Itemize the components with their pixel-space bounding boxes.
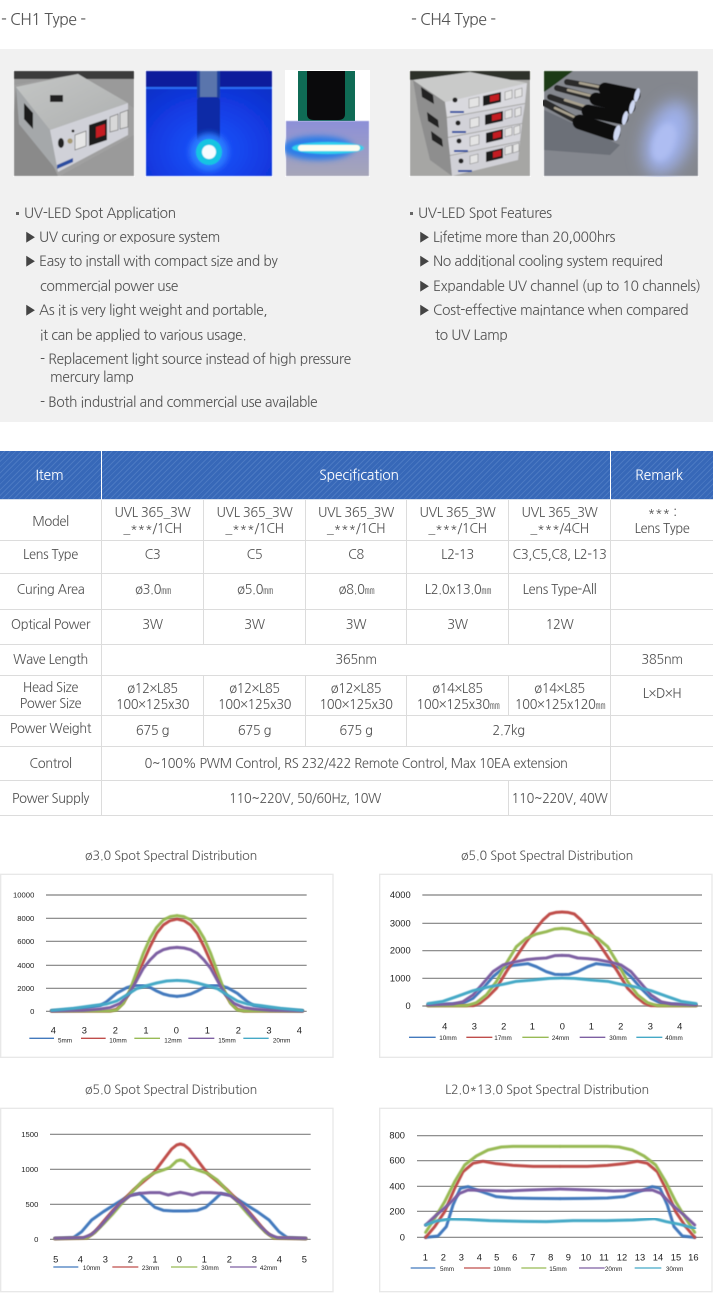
x axis labels: 2 <box>113 1025 118 1035</box>
x axis labels: 6 <box>512 1253 517 1263</box>
photo: line beam lens <box>285 70 370 177</box>
chart: ø5.0 spot spectral distribution, bottom left <box>0 1083 334 1292</box>
text block: UV-LED Spot Application <box>16 206 351 410</box>
x axis labels: 15 <box>671 1253 681 1263</box>
row: Model: _***/1CH <box>327 522 385 534</box>
y axis labels: 0 <box>30 1007 34 1016</box>
text block: UV-LED Spot Features: to UV Lamp <box>435 329 508 343</box>
y axis labels: 0 <box>400 1232 405 1242</box>
chart title: ø5.0 Spot Spectral Distribution <box>85 1083 257 1096</box>
series: 10mm <box>428 964 696 1005</box>
row: Power Supply <box>0 781 713 816</box>
row: Curing Area: L2.0x13.0㎜ <box>425 582 490 596</box>
y axis labels: 3000 <box>390 918 411 928</box>
row: Head Size and Power Size: L×D×H <box>643 687 681 700</box>
y axis labels <box>21 1130 38 1244</box>
x axis labels: 2 <box>501 1022 506 1032</box>
series: 30mm <box>428 955 696 1005</box>
legend: 24mm <box>552 1035 569 1042</box>
legend: 20mm <box>273 1038 290 1044</box>
y axis labels: 2000 <box>390 946 411 956</box>
row: Power Weight: 2.7kg <box>492 724 525 736</box>
x axis labels: 0 <box>177 1255 182 1265</box>
x axis labels: 4 <box>677 1022 682 1032</box>
row: Model: UVL 365_3W <box>419 506 496 518</box>
row: Optical Power <box>0 610 713 645</box>
row: Curing Area: Curing Area <box>17 583 84 596</box>
series: 10mm <box>52 919 302 1011</box>
chart: ø3.0 spot spectral distribution <box>0 849 334 1058</box>
x axis labels <box>51 1025 302 1035</box>
row: Head Size and Power Size: Power Size <box>20 696 81 710</box>
row: Curing Area: ø3.0㎜ <box>135 582 170 596</box>
series: 10mm <box>55 1194 306 1238</box>
text block: UV-LED Spot Application: UV-LED Spot Application <box>24 207 176 221</box>
text block: UV-LED Spot Application: UV curing or exposure system <box>39 231 220 245</box>
text block: UV-LED Spot Features: ▶ <box>418 231 431 245</box>
row: Head Size and Power Size: ø12×L85 <box>331 682 381 695</box>
series: 5mm <box>426 1187 695 1237</box>
x axis labels: 2 <box>128 1255 133 1265</box>
chart title: ø5.0 Spot Spectral Distribution <box>461 849 633 862</box>
x axis labels: 4 <box>297 1025 302 1035</box>
x axis labels: 4 <box>51 1025 56 1035</box>
x axis labels: 2 <box>236 1025 241 1035</box>
row: Curing Area: ø5.0㎜ <box>237 582 272 596</box>
row: Head Size and Power Size: 100×125x30 <box>319 698 393 711</box>
x axis labels: 4 <box>78 1255 83 1265</box>
row: Model: UVL 365_3W <box>522 506 598 518</box>
row: Head Size and Power Size: ø12×L85 <box>229 682 280 695</box>
text block: UV-LED Spot Application: Easy to install with compact size and by <box>39 255 278 269</box>
row: Wave Length: 365nm <box>335 652 377 666</box>
row: Model: _***/4CH <box>530 522 589 534</box>
table header row <box>0 451 713 500</box>
x axis labels: 3 <box>252 1255 257 1265</box>
row: Power Weight: Power Weight <box>10 722 91 734</box>
row: Head Size and Power Size <box>0 676 713 716</box>
chart title: L2.0*13.0 Spot Spectral Distribution <box>445 1083 649 1096</box>
legend: 10mm <box>439 1035 457 1042</box>
y axis labels: 400 <box>389 1181 405 1191</box>
x axis labels: 1 <box>152 1255 158 1265</box>
table header row: Specification <box>319 468 399 482</box>
series: 30mm <box>55 1160 306 1239</box>
text block: UV-LED Spot Application: - Replacement light source instead of high pressure <box>40 353 351 367</box>
legend <box>53 1265 277 1272</box>
x axis labels: 13 <box>635 1253 645 1263</box>
x axis labels: 5 <box>302 1255 307 1265</box>
x axis labels: 12 <box>617 1253 627 1263</box>
text block: UV-LED Spot Features: Expandable UV channel (up to 10 channels) <box>433 280 700 294</box>
row: Head Size and Power Size: 100×125x30 <box>218 698 291 711</box>
x axis labels: 5 <box>494 1253 499 1263</box>
series: 23mm <box>55 1144 306 1239</box>
row: Optical Power: 3W <box>244 618 265 630</box>
row: Optical Power: 3W <box>447 618 468 630</box>
x axis labels: 8 <box>548 1253 553 1263</box>
x axis labels: 3 <box>472 1022 477 1032</box>
x axis labels: 11 <box>599 1253 609 1263</box>
row: Model: _***/1CH <box>225 522 284 534</box>
x axis labels: 4 <box>442 1022 447 1032</box>
chart frame <box>1 1108 333 1292</box>
row: Model: _***/1CH <box>123 522 182 534</box>
y axis labels: 800 <box>389 1131 405 1141</box>
row: Optical Power: 3W <box>142 618 163 630</box>
row: Model <box>0 500 713 541</box>
text block: UV-LED Spot Application: it can be applied to various usage. <box>40 329 246 343</box>
legend: 23mm <box>142 1265 159 1272</box>
row: Head Size and Power Size: ø14×L85 <box>534 682 585 694</box>
x axis labels: 0 <box>174 1025 179 1035</box>
legend: 10mm <box>493 1266 511 1273</box>
chart: ø5.0 spot spectral distribution, top right <box>379 849 712 1058</box>
x axis labels: 0 <box>560 1022 565 1032</box>
row: Control: 0~100% PWM Control, RS 232/422 Remote Control, Max 10EA extension <box>145 757 568 770</box>
legend: 5mm <box>58 1038 72 1044</box>
row: Model: Lens Type <box>635 522 690 534</box>
table header row: Item <box>35 468 64 482</box>
series: 20mm <box>426 1189 695 1225</box>
y axis labels: 0 <box>405 1001 411 1011</box>
row: Curing Area: ø8.0㎜ <box>339 582 373 596</box>
text block: UV-LED Spot Features: ▶ <box>418 255 431 269</box>
legend: 30mm <box>609 1035 627 1042</box>
series: 10mm <box>426 1161 695 1237</box>
x axis labels: 2 <box>618 1022 623 1032</box>
y axis labels: 6000 <box>17 937 34 946</box>
x axis labels: 3 <box>648 1022 653 1032</box>
y axis labels: 1500 <box>21 1130 38 1139</box>
row: Lens Type: C3,C5,C8, L2-13 <box>513 548 606 560</box>
x axis labels: 9 <box>566 1253 571 1263</box>
x axis labels: 3 <box>266 1025 272 1035</box>
legend: 40mm <box>665 1035 683 1042</box>
row: Power Supply: Power Supply <box>12 792 89 804</box>
x axis labels: 3 <box>459 1253 464 1263</box>
row: Wave Length <box>0 645 713 676</box>
legend: 20mm <box>605 1266 622 1273</box>
row: Head Size and Power Size: 100×125x30 <box>116 698 189 711</box>
chart title: ø3.0 Spot Spectral Distribution <box>85 849 257 862</box>
photo: CH4 stacked controllers <box>409 70 531 177</box>
y axis labels: 8000 <box>17 914 34 923</box>
row: Model: UVL 365_3W <box>318 506 394 518</box>
x axis labels: 3 <box>82 1025 87 1035</box>
row: Optical Power: 12W <box>546 618 574 630</box>
text block: UV-LED Spot Application: As it is very light weight and portable, <box>39 304 267 318</box>
row: Lens Type: Lens Type <box>23 548 78 560</box>
panel: grey product overview <box>0 49 713 422</box>
legend: 30mm <box>666 1266 683 1273</box>
legend: 12mm <box>164 1038 182 1044</box>
text block: UV-LED Spot Application: ▶ <box>24 255 37 269</box>
y axis labels: 600 <box>389 1156 405 1166</box>
row: Head Size and Power Size: 100×125x30㎜ <box>416 698 499 710</box>
x axis labels: 1 <box>143 1025 149 1035</box>
table header row: Remark <box>635 468 683 482</box>
y axis labels <box>13 890 34 1016</box>
legend: 17mm <box>494 1035 512 1042</box>
x axis labels <box>442 1022 682 1032</box>
x axis labels: 1 <box>589 1022 594 1032</box>
row: Power Weight <box>0 716 713 747</box>
x axis labels: 1 <box>205 1025 210 1035</box>
series: 15mm <box>426 1146 695 1232</box>
text block: UV-LED Spot Features: Lifetime more than 20,000hrs <box>433 231 615 245</box>
legend: 15mm <box>549 1266 567 1273</box>
row: Model: UVL 365_3W <box>114 506 190 518</box>
row: Model: _***/1CH <box>428 522 487 534</box>
text block: UV-LED Spot Features: UV-LED Spot Features <box>418 207 552 221</box>
series: 15mm <box>52 947 302 1011</box>
text block: UV-LED Spot Application: commercial power use <box>40 280 178 294</box>
row: Control <box>0 747 713 781</box>
row: Optical Power: 3W <box>346 618 366 630</box>
text block: UV-LED Spot Features: ▶ <box>418 280 431 294</box>
x axis labels: 5 <box>53 1255 58 1265</box>
legend <box>29 1038 290 1044</box>
x axis labels: 4 <box>277 1255 282 1265</box>
x axis labels: 14 <box>653 1253 663 1263</box>
row: Head Size and Power Size: 100×125x120㎜ <box>515 698 604 710</box>
row: Wave Length: Wave Length <box>13 652 88 666</box>
legend <box>411 1266 683 1273</box>
text block: UV-LED Spot Application: - Both industrial and commercial use available <box>40 396 317 410</box>
photo: CH1 controller box <box>13 70 135 177</box>
chart frame <box>380 874 712 1057</box>
row: Optical Power: Optical Power <box>11 618 90 630</box>
series: 5mm <box>52 986 302 1011</box>
x axis labels: 4 <box>477 1253 482 1263</box>
legend: 10mm <box>83 1265 100 1272</box>
legend: 42mm <box>260 1265 277 1272</box>
series: 40mm <box>428 978 696 1004</box>
row: Model: UVL 365_3W <box>216 506 292 518</box>
row: Power Weight: 675 g <box>238 724 271 736</box>
row: Lens Type: C8 <box>348 548 364 560</box>
x axis labels <box>423 1253 699 1263</box>
x axis labels: 1 <box>530 1022 535 1032</box>
series: 20mm <box>52 980 302 1010</box>
text block: UV-LED Spot Application: mercury lamp <box>50 371 134 385</box>
x axis labels: 1 <box>423 1253 428 1263</box>
series: 42mm <box>55 1192 306 1238</box>
y axis labels: 4000 <box>390 890 411 900</box>
y axis labels: 500 <box>26 1200 38 1209</box>
x axis labels: 1 <box>202 1255 207 1265</box>
legend <box>409 1035 683 1042</box>
row: Control: Control <box>29 757 72 770</box>
x axis labels: 2 <box>441 1253 446 1263</box>
series: 30mm <box>426 1219 695 1228</box>
text block: UV-LED Spot Features: Cost-effective maintance when compared <box>433 304 688 318</box>
row: Power Weight: 675 g <box>136 724 169 736</box>
row: Head Size and Power Size: ø12×L85 <box>127 682 178 695</box>
text block: UV-LED Spot Application: ▶ <box>24 304 37 318</box>
x axis labels <box>53 1255 307 1265</box>
y axis labels: 10000 <box>13 890 34 900</box>
series: 24mm <box>428 928 696 1006</box>
text block: UV-LED Spot Application: ▶ <box>24 231 37 245</box>
row: Power Supply: 110~220V, 40W <box>512 792 608 804</box>
row: Model: *** : <box>647 506 677 518</box>
y axis labels: 0 <box>34 1235 38 1244</box>
row: Head Size and Power Size: ø14×L85 <box>432 682 483 694</box>
legend: 10mm <box>109 1038 127 1044</box>
y axis labels: 1000 <box>390 973 411 983</box>
row: Model: Model <box>32 515 69 528</box>
photo: four UV lamp heads with glow <box>543 70 699 177</box>
x axis labels: 10 <box>581 1253 591 1263</box>
x axis labels: 7 <box>530 1253 535 1263</box>
y axis labels <box>389 1131 405 1242</box>
y axis labels: 4000 <box>17 961 34 970</box>
series: 17mm <box>428 912 696 1006</box>
text block: UV-LED Spot Features: ▶ <box>418 304 431 318</box>
row: Curing Area <box>0 574 713 610</box>
heading: CH4 Type: - CH4 Type - <box>411 12 496 28</box>
row: Lens Type: C3 <box>145 548 160 560</box>
row: Lens Type <box>0 541 713 574</box>
x axis labels: 16 <box>688 1253 699 1263</box>
chart frame <box>1 874 333 1057</box>
y axis labels: 1000 <box>21 1165 38 1174</box>
y axis labels: 200 <box>389 1206 405 1216</box>
row: Wave Length: 385nm <box>641 652 683 666</box>
legend: 5mm <box>440 1266 454 1273</box>
row: Curing Area: Lens Type-All <box>523 583 596 596</box>
row: Power Supply: 110~220V, 50/60Hz, 10W <box>229 792 381 804</box>
text block: UV-LED Spot Features <box>410 207 700 343</box>
photo: blue spot beam <box>145 70 273 177</box>
legend: 30mm <box>201 1265 219 1272</box>
specification table <box>0 451 713 816</box>
row: Lens Type: L2-13 <box>441 548 474 560</box>
x axis labels: 2 <box>227 1255 232 1265</box>
y axis labels <box>390 890 411 1011</box>
text block: UV-LED Spot Features: No additional cooling system required <box>433 255 663 269</box>
chart: L2.0*13.0 spot spectral distribution <box>379 1083 712 1292</box>
row: Lens Type: C5 <box>247 548 262 560</box>
heading: CH1 Type: - CH1 Type - <box>1 12 86 28</box>
row: Head Size and Power Size: Head Size <box>23 680 78 694</box>
series: 12mm <box>52 916 302 1011</box>
legend: 15mm <box>218 1038 236 1044</box>
chart frame <box>380 1108 712 1292</box>
x axis labels: 3 <box>103 1255 108 1265</box>
y axis labels: 2000 <box>17 984 34 993</box>
row: Power Weight: 675 g <box>339 724 373 736</box>
